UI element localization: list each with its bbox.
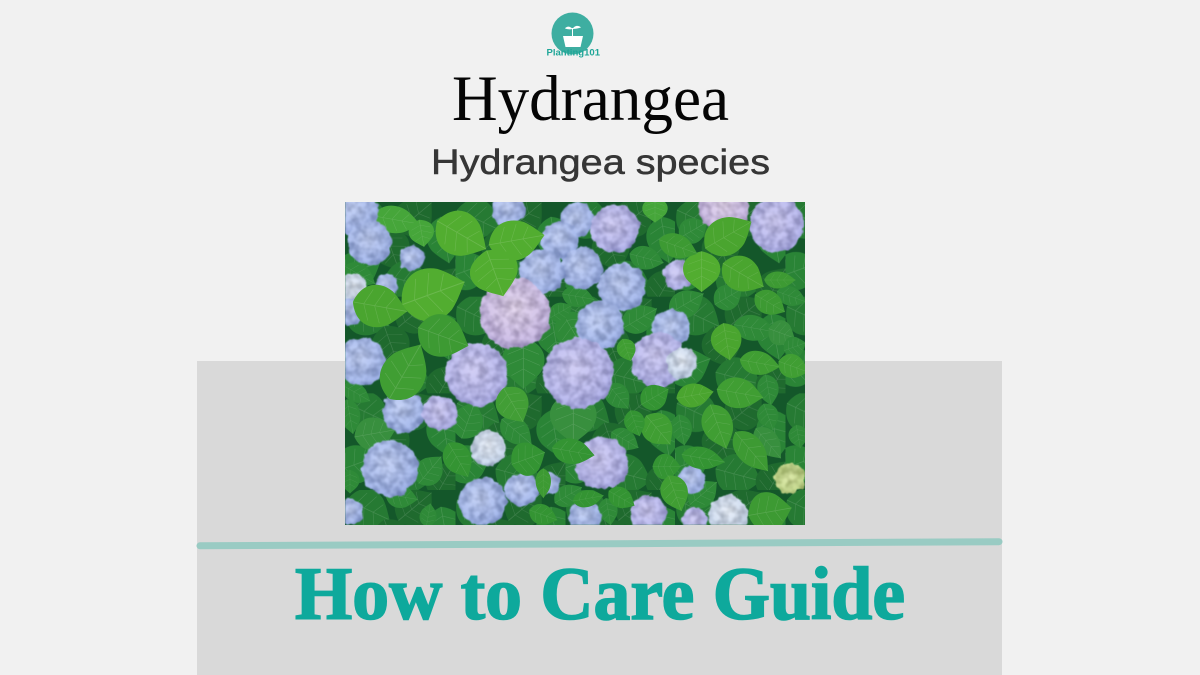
foliage background xyxy=(345,200,805,525)
title: Hydrangea xyxy=(452,63,729,135)
icon: pot with sprout xyxy=(563,26,583,47)
logo wordmark: Planting101 xyxy=(546,48,601,58)
mid foliage layer xyxy=(336,197,810,528)
subtitle: Hydrangea species xyxy=(431,143,770,182)
bright foreground leaves xyxy=(349,202,812,535)
shadowed leaf underlayer xyxy=(345,200,805,525)
logo: Planting101 xyxy=(546,12,601,58)
grey panel behind photo and guide heading xyxy=(197,361,1002,675)
guide heading: How to Care Guide xyxy=(295,553,905,636)
photo: hydrangea bush xyxy=(345,202,805,525)
hydrangea blooms xyxy=(332,183,805,535)
teal divider line xyxy=(200,542,999,546)
logo circle xyxy=(552,12,594,54)
